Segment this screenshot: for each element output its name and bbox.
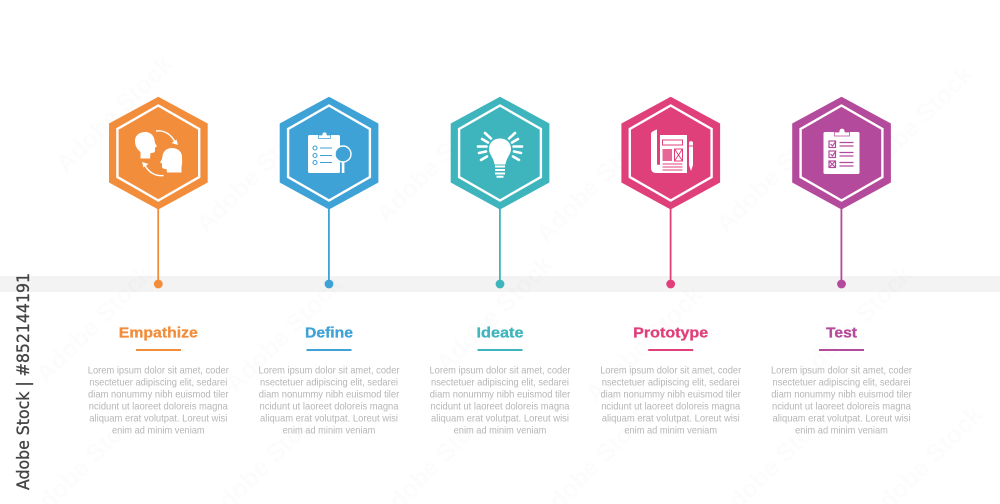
- stock watermarks: Adobe Stock: [710, 110, 838, 238]
- step 1: Empathize: [88, 97, 229, 436]
- description: nsectetuer adipiscing elit, sedarei: [431, 376, 569, 388]
- description: ncidunt ut laoreet doloreis magna: [772, 400, 911, 412]
- hexagon badge: [621, 97, 720, 210]
- description: diam nonummy nibh euismod tiler: [430, 388, 571, 400]
- description: aliquam erat volutpat. Loreut wisi: [431, 412, 569, 424]
- heading underline: [648, 349, 693, 351]
- heading: Ideate: [476, 324, 524, 342]
- stock watermarks: Adobe Stock: [50, 50, 178, 178]
- hexagon badge: [792, 97, 891, 210]
- description: aliquam erat volutpat. Loreut wisi: [602, 412, 740, 424]
- description: enim ad minim veniam: [624, 424, 717, 436]
- description: diam nonummy nibh euismod tiler: [600, 388, 741, 400]
- icon: light bulb with rays: [478, 133, 522, 177]
- heading: Empathize: [119, 324, 198, 342]
- timeline band: [0, 276, 1000, 292]
- description: Lorem ipsum dolor sit amet, coder: [771, 364, 912, 376]
- step 2: Define: [258, 97, 400, 436]
- description: nsectetuer adipiscing elit, sedarei: [772, 376, 910, 388]
- description: ncidunt ut laoreet doloreis magna: [430, 400, 570, 412]
- description: diam nonummy nibh euismod tiler: [259, 388, 400, 400]
- vertical stock credit: Adobe Stock | #852144191: [14, 273, 34, 490]
- description: [88, 364, 229, 436]
- icon: blueprint sheet with pencil: [651, 130, 693, 173]
- description: [258, 364, 400, 436]
- connector line and dot: [666, 205, 675, 288]
- step 3: Ideate: [430, 97, 571, 436]
- icon: checklist clipboard: [824, 128, 860, 174]
- icon: two heads with exchange arrows: [135, 131, 182, 176]
- heading underline: [478, 349, 522, 351]
- connector line and dot: [154, 205, 163, 288]
- heading underline: [819, 349, 864, 351]
- description: diam nonummy nibh euismod tiler: [88, 388, 229, 400]
- hexagon badge: [280, 97, 378, 210]
- description: aliquam erat volutpat. Loreut wisi: [89, 412, 227, 424]
- stock watermarks: Adobe Stock: [580, 280, 708, 408]
- connector line and dot: [496, 205, 504, 288]
- stock watermarks: Adobe Stock: [220, 270, 348, 398]
- heading underline: [136, 349, 181, 351]
- stock watermarks: Adobe Stock: [850, 60, 978, 188]
- stock watermarks: Adobe Stock: [790, 260, 918, 388]
- step 4: Prototype: [600, 97, 742, 436]
- step 5: Test: [771, 97, 912, 436]
- stock watermarks: Adobe Stock: [190, 110, 318, 238]
- description: [771, 364, 912, 436]
- heading: Test: [826, 324, 857, 342]
- description: Lorem ipsum dolor sit amet, coder: [600, 364, 742, 376]
- description: aliquam erat volutpat. Loreut wisi: [772, 412, 910, 424]
- description: ncidunt ut laoreet doloreis magna: [89, 400, 228, 412]
- description: nsectetuer adipiscing elit, sedarei: [89, 376, 227, 388]
- description: Lorem ipsum dolor sit amet, coder: [430, 364, 571, 376]
- description: enim ad minim veniam: [454, 424, 547, 436]
- heading: Define: [305, 324, 353, 342]
- hexagon badge: [109, 97, 208, 210]
- stock watermarks: Adobe Stock: [430, 250, 558, 378]
- description: enim ad minim veniam: [112, 424, 205, 436]
- heading: Prototype: [633, 324, 708, 342]
- description: nsectetuer adipiscing elit, sedarei: [602, 376, 740, 388]
- description: [600, 364, 742, 436]
- description: aliquam erat volutpat. Loreut wisi: [260, 412, 398, 424]
- description: Lorem ipsum dolor sit amet, coder: [258, 364, 400, 376]
- stock watermarks: Adobe Stock: [530, 120, 658, 248]
- connector line and dot: [837, 205, 846, 288]
- icon: clipboard with magnifier: [308, 132, 351, 173]
- description: enim ad minim veniam: [283, 424, 376, 436]
- description: diam nonummy nibh euismod tiler: [771, 388, 912, 400]
- description: ncidunt ut laoreet doloreis magna: [260, 400, 399, 412]
- description: Lorem ipsum dolor sit amet, coder: [88, 364, 229, 376]
- description: ncidunt ut laoreet doloreis magna: [601, 400, 740, 412]
- heading underline: [306, 349, 352, 351]
- stock watermarks: Adobe Stock: [370, 100, 498, 228]
- description: nsectetuer adipiscing elit, sedarei: [260, 376, 398, 388]
- description: enim ad minim veniam: [795, 424, 888, 436]
- hexagon badge: [451, 97, 549, 210]
- description: [430, 364, 571, 436]
- connector line and dot: [325, 205, 333, 288]
- stock watermarks: Adobe Stock: [30, 260, 158, 388]
